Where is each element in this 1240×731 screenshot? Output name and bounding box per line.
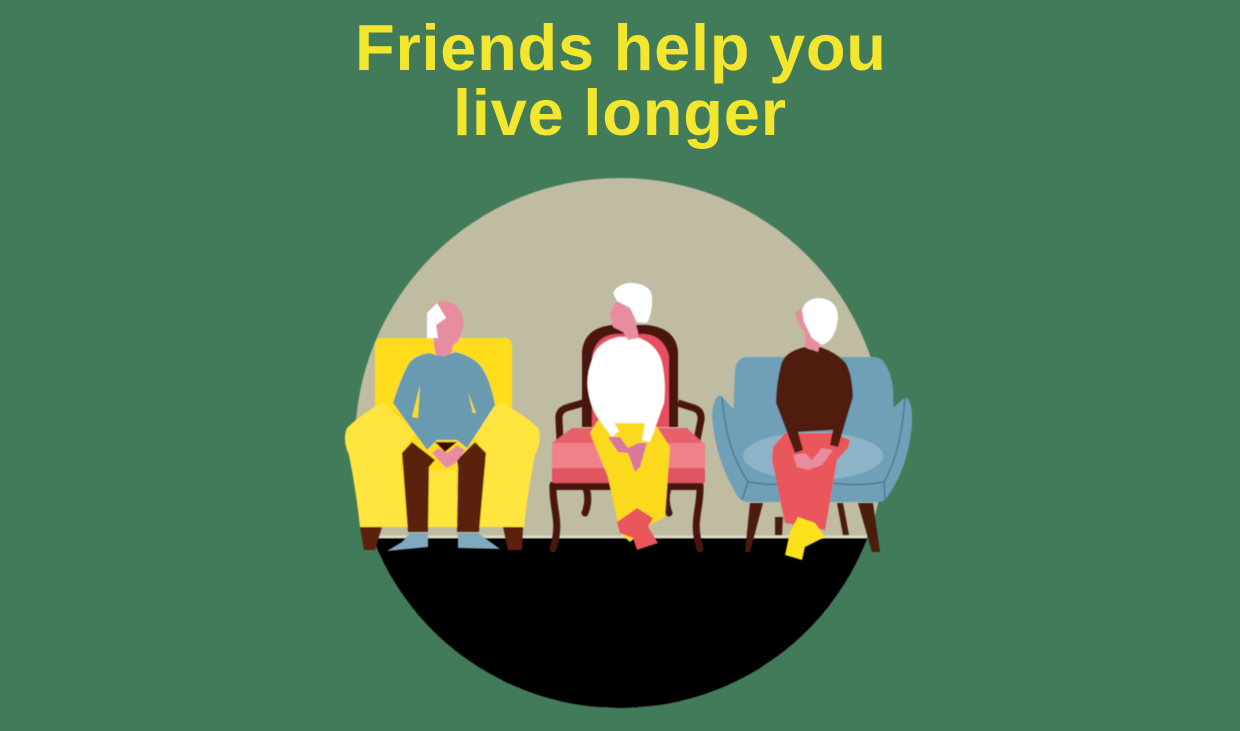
red shoes bbox=[617, 508, 658, 550]
yellow trousers bbox=[590, 420, 670, 542]
head bbox=[610, 300, 638, 340]
red trousers bbox=[772, 433, 850, 530]
yellow shoes bbox=[785, 517, 825, 560]
blue sweater bbox=[393, 352, 495, 450]
wooden chair bbox=[552, 325, 705, 549]
hands bbox=[608, 437, 647, 472]
title: live longer bbox=[453, 76, 786, 149]
trousers bbox=[402, 442, 486, 532]
head bbox=[795, 308, 820, 352]
woman in red chair bbox=[552, 283, 705, 550]
blue chair bbox=[712, 357, 912, 552]
title: Friends help you bbox=[355, 11, 886, 84]
white hair bbox=[613, 283, 652, 323]
white hair bbox=[427, 303, 446, 338]
man in yellow armchair bbox=[345, 301, 540, 551]
yellow armchair bbox=[345, 338, 540, 550]
woman in blue chair bbox=[712, 298, 912, 560]
hands bbox=[793, 448, 833, 470]
brown sweater bbox=[776, 347, 853, 453]
hands bbox=[432, 445, 465, 468]
title bbox=[355, 11, 886, 149]
white hair bbox=[802, 298, 838, 345]
head bbox=[427, 301, 464, 356]
spotlight circle with floor bbox=[355, 178, 885, 708]
shoes bbox=[387, 533, 500, 551]
white blouse bbox=[588, 337, 665, 442]
